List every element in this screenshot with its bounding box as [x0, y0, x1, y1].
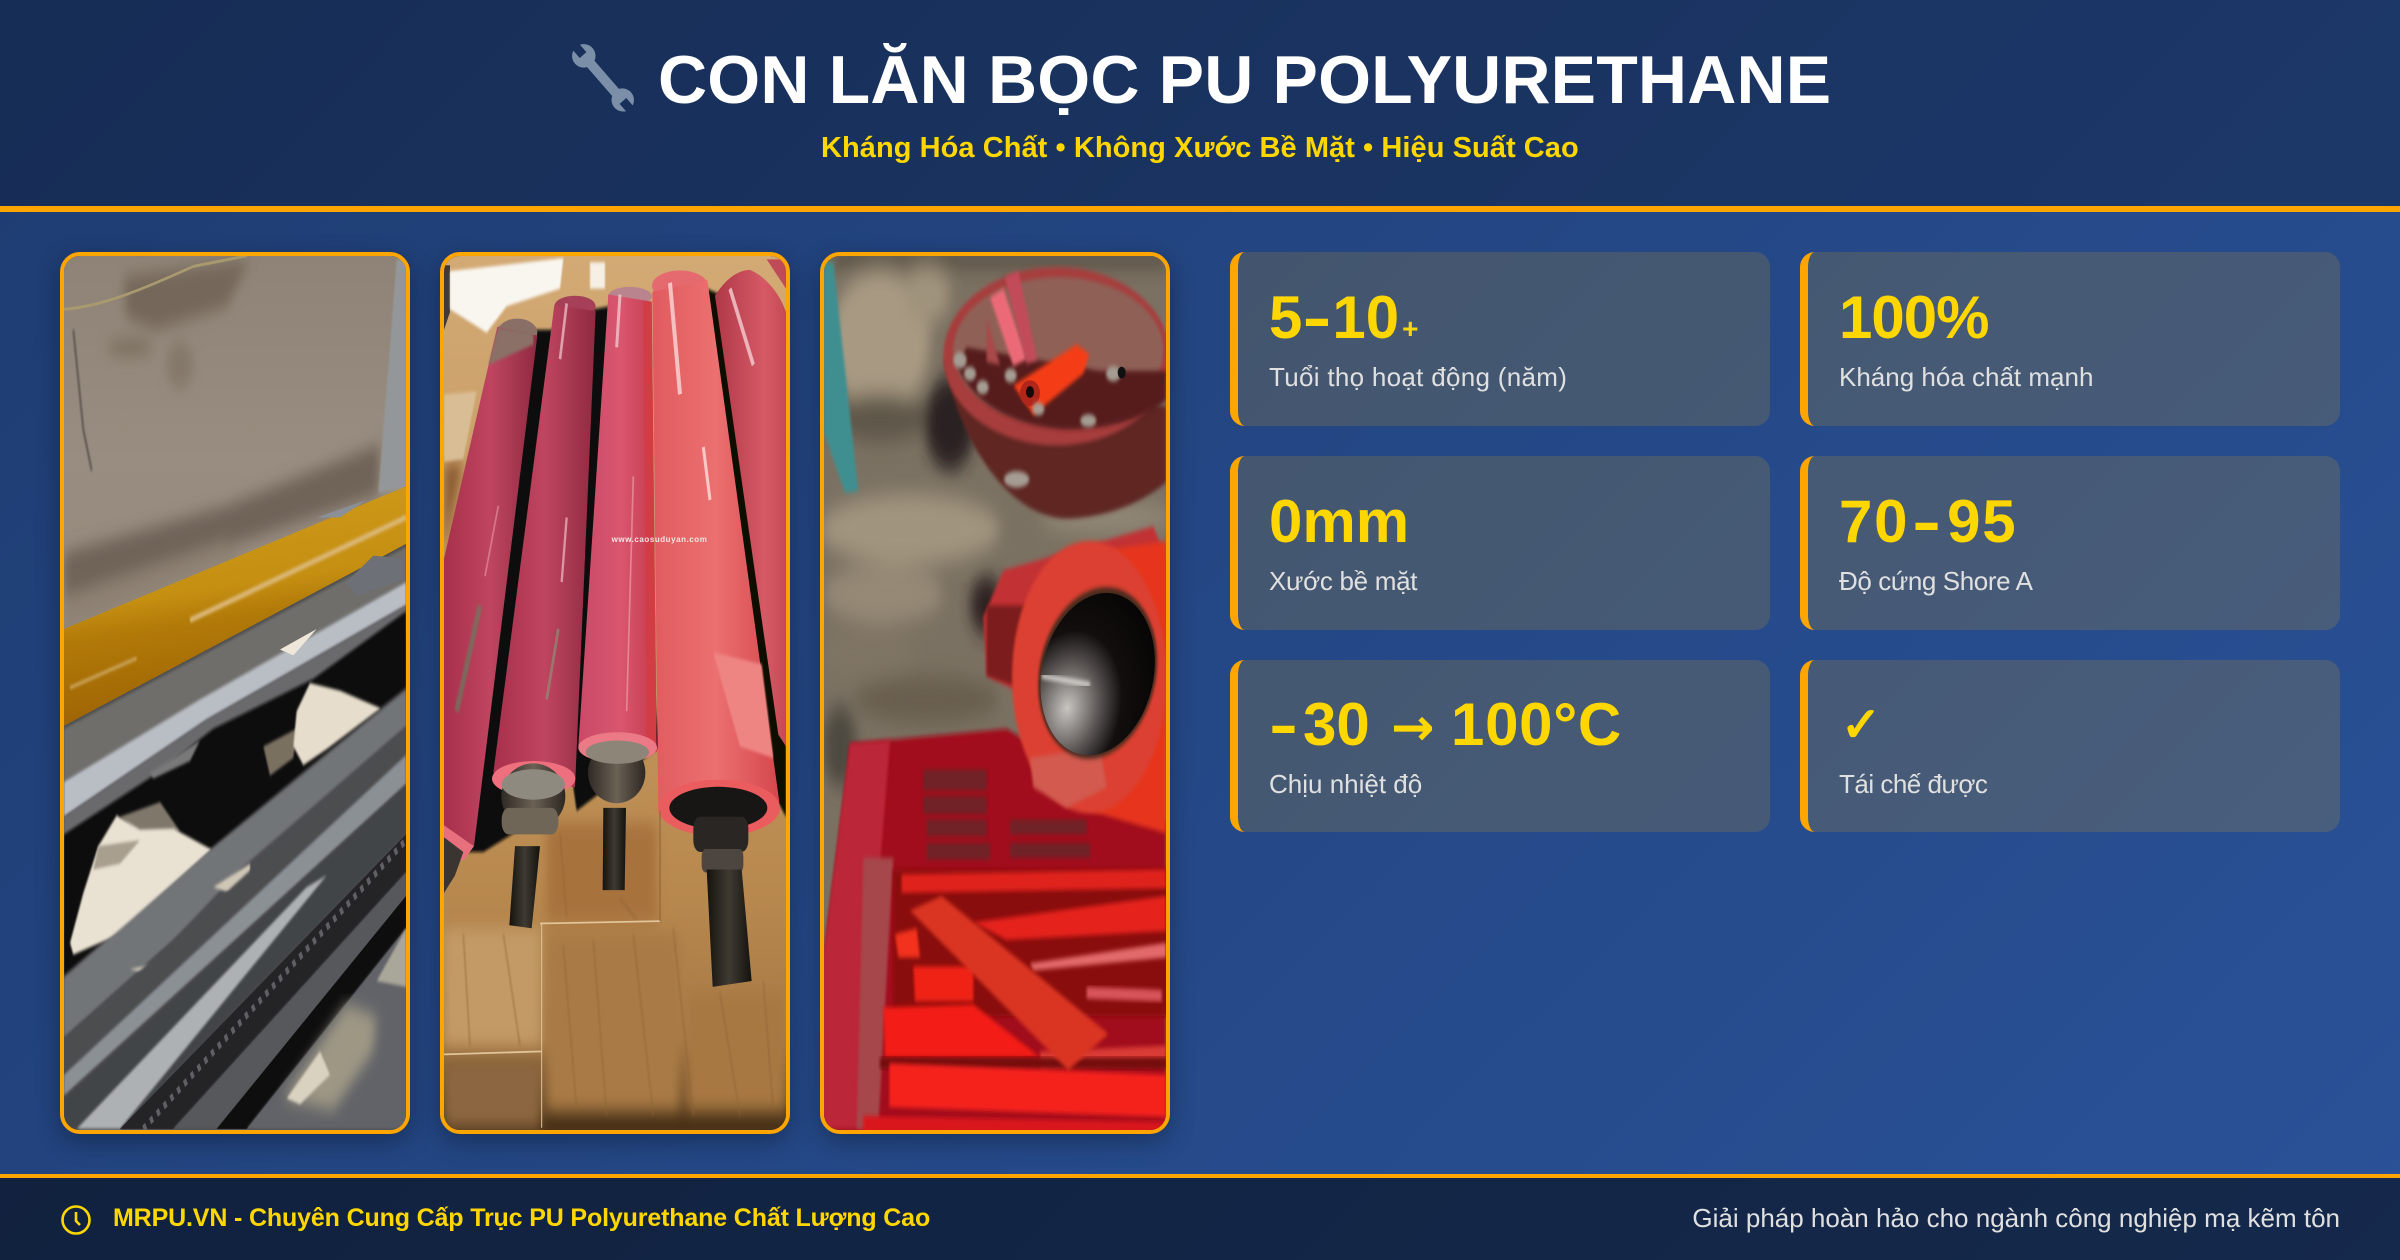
stat card: service life — [1230, 252, 1770, 426]
stat card: chemical resistance — [1800, 252, 2340, 426]
value: - — [1303, 284, 1332, 351]
title: CON LĂN BỌC PU POLYURETHANE — [658, 42, 1831, 118]
header band — [0, 0, 2400, 212]
stat card: temperature range — [1230, 660, 1770, 832]
rails — [64, 729, 406, 1081]
value: - — [1269, 691, 1298, 758]
stat card: shore A hardness — [1800, 456, 2340, 630]
value: → — [1391, 698, 1435, 758]
value: 100°C — [1451, 691, 1622, 758]
roller 5 — [715, 270, 786, 746]
footer right text: Giải pháp hoàn hảo cho ngành công nghiệp mạ kẽm tôn — [1692, 1203, 2340, 1233]
lower machine — [64, 541, 406, 1150]
big tube — [1053, 541, 1166, 833]
icon: wrench — [572, 44, 634, 112]
icon: clock — [61, 1205, 91, 1235]
crate — [824, 729, 1166, 1150]
roller 4 — [652, 270, 708, 301]
value: - — [1912, 488, 1944, 555]
panel: photo of red PU rollers on wooden floor — [440, 252, 790, 1134]
label: Tuổi thọ hoạt động (năm) — [1269, 362, 1567, 392]
stat card: surface scratches — [1230, 456, 1770, 630]
roller 1 — [497, 319, 537, 347]
bowl — [944, 359, 1166, 519]
value — [1269, 691, 1622, 758]
roller 2 — [554, 296, 596, 317]
roller 3 — [608, 287, 652, 306]
label: Xước bề mặt — [1269, 566, 1417, 596]
stat card: recyclable — [1800, 660, 2340, 832]
watermark: www.caosuduyan.com — [611, 535, 707, 544]
wood seams — [444, 921, 660, 1128]
label: Tái chế được — [1839, 769, 1987, 799]
rough grey band — [64, 691, 406, 1037]
teal post — [824, 262, 858, 493]
panel: photo of yellow roller in galvanizing line — [60, 252, 410, 1134]
footer left text: MRPU.VN - Chuyên Cung Cấp Trục PU Polyurethane Chất Lượng Cao — [113, 1204, 930, 1232]
value: 0mm — [1269, 488, 1409, 555]
value: 30 — [1303, 691, 1370, 758]
value: 100% — [1839, 284, 1988, 351]
label: Độ cứng Shore A — [1839, 566, 2033, 596]
gaps / shadows — [460, 330, 580, 852]
subtitle: Kháng Hóa Chất • Không Xước Bề Mặt • Hiệu Suất Cao — [821, 132, 1579, 164]
black trough — [64, 611, 406, 975]
label: Chịu nhiệt độ — [1269, 769, 1422, 799]
label: Kháng hóa chất mạnh — [1839, 362, 2093, 392]
red tubes in crate — [893, 870, 1170, 1016]
yellow roller — [64, 486, 406, 726]
value: ✓ — [1841, 697, 1881, 753]
value: 70 95 — [1839, 488, 2017, 555]
value: 5 10+ — [1269, 284, 1418, 351]
panel: photo of red PU parts in crates — [820, 252, 1170, 1134]
footer band — [0, 1174, 2400, 1260]
red block behind — [983, 526, 1166, 699]
